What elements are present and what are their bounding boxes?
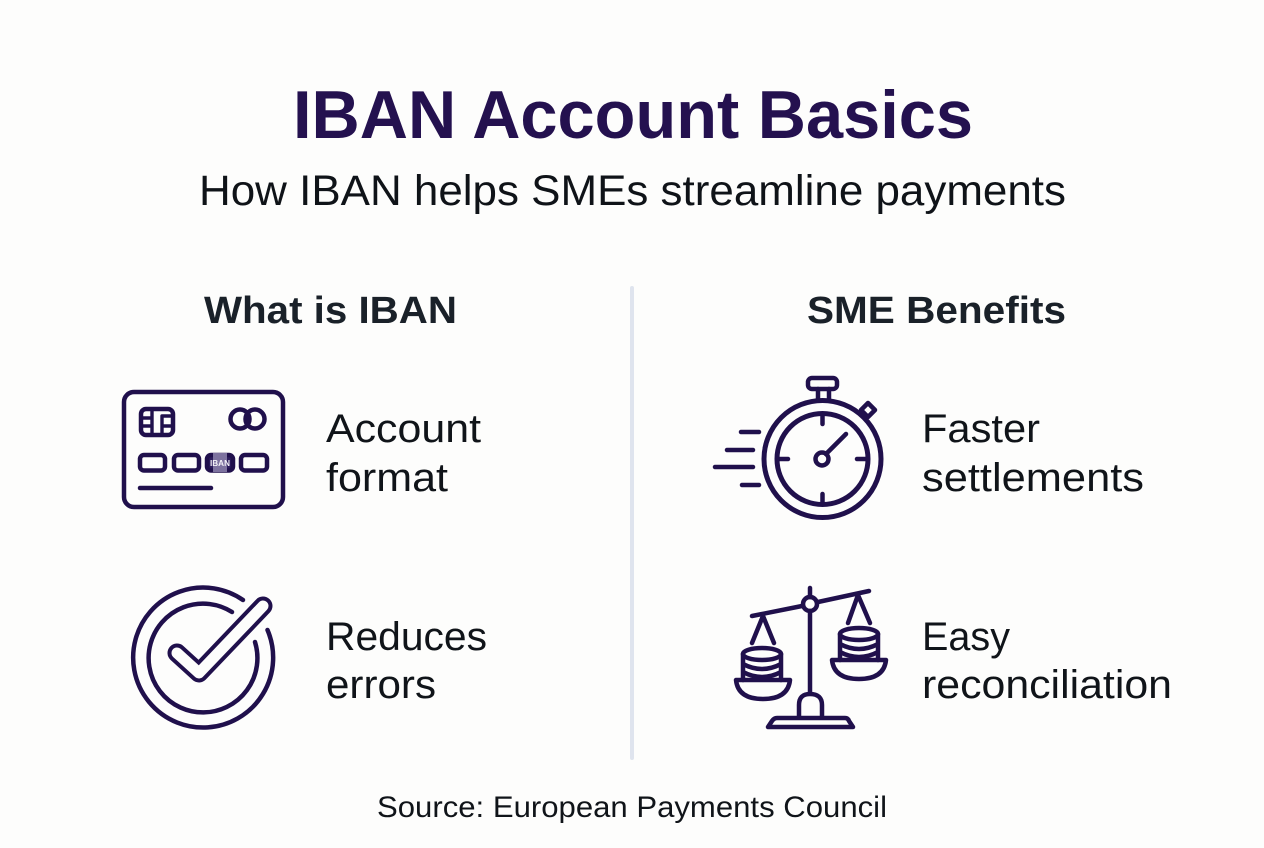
label: reduces errors: errors [326,663,436,707]
card logo circles [230,410,264,428]
panel: what is IBAN [124,290,487,728]
left pan [736,616,790,699]
icon: check in circles [133,588,273,728]
label: faster settlements: Faster [922,407,1040,451]
heading: SME benefits: SME Benefits [807,290,1066,332]
account number boxes: IBAN [210,459,230,468]
check mark [177,606,263,673]
side button [861,403,875,417]
title: IBAN Account Basics [293,77,973,153]
source: Source: European Payments Council [377,791,887,824]
label: easy reconciliation [922,615,1172,707]
icon: balance scale with coins [736,588,886,727]
divider [630,286,634,760]
label: easy reconciliation: Easy [922,615,1010,659]
chip [141,409,173,435]
panel: SME benefits [715,290,1172,727]
icon: bank card [124,392,283,507]
label: reduces errors [326,615,487,707]
label: faster settlements: settlements [922,456,1144,500]
label: account format: format [326,456,448,500]
heading: what is IBAN: What is IBAN [204,290,457,332]
label: account format: Account [326,407,481,451]
icon: stopwatch [715,378,881,518]
label: reduces errors: Reduces [326,615,487,659]
signature line [140,486,211,490]
subtitle: How IBAN helps SMEs streamline payments [199,167,1066,215]
account number boxes [140,453,267,472]
label: faster settlements [922,407,1144,500]
label: easy reconciliation: reconciliation [922,663,1172,707]
crown [808,378,837,400]
right pan [832,595,886,679]
label: account format [326,407,481,500]
speed lines [715,432,759,485]
